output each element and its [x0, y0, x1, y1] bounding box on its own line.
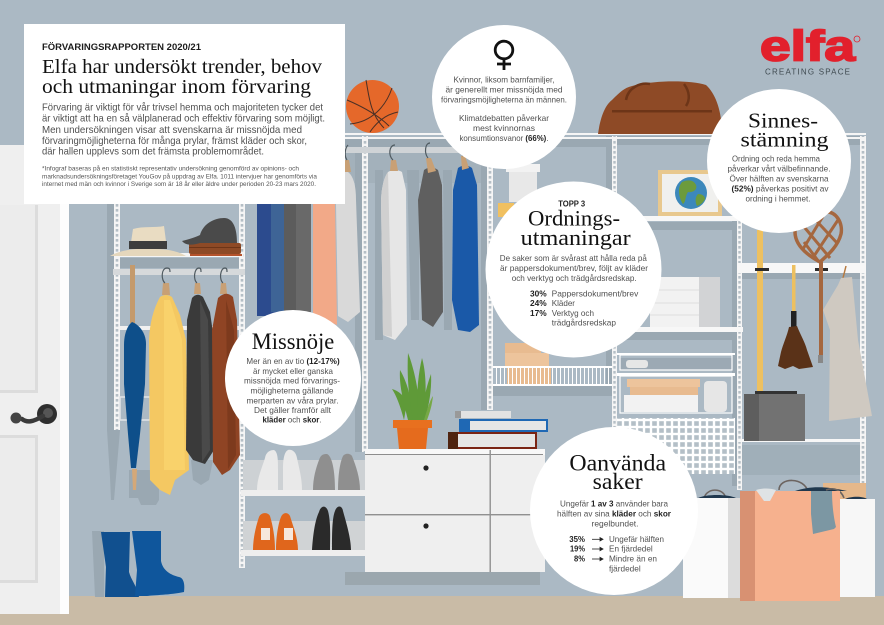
- mop handle and dustpan box: [744, 230, 805, 441]
- stacked towels: [650, 277, 720, 327]
- footnote: *Infograf baseras på en statistiskt representativ undersökning genomförd av opinions- och: [42, 166, 300, 173]
- callout: mood: [707, 89, 851, 233]
- callout text: [441, 75, 567, 143]
- panel: intro: [24, 24, 345, 204]
- callout text: är pappersdokument/brev, följt av kläder: [500, 263, 648, 273]
- icon: cap and folded scarf: [182, 218, 241, 254]
- callout text: Det gäller framför allt: [254, 405, 332, 415]
- middle hanging clothes: [257, 143, 479, 340]
- statistics list with arrows: [569, 534, 664, 574]
- intro text: där hallen upplevs som det främsta problemområdet.: [42, 146, 264, 158]
- statistics list: 30%: [530, 289, 547, 299]
- duffel bag: [598, 81, 722, 134]
- callout heading: Ordnings-: [528, 206, 620, 231]
- title: [42, 56, 323, 98]
- callout text: möjligheterna gällande: [250, 385, 334, 395]
- callout: dissatisfaction: [225, 310, 361, 446]
- icon: female symbol: [495, 41, 513, 70]
- callout text: påverkar vårt välbefinnande.: [728, 164, 830, 174]
- picture frame with globe: [658, 170, 722, 216]
- statistics list with arrows: Mindre än en: [609, 554, 657, 564]
- callout text: [557, 499, 672, 529]
- callout heading: Sinnes-: [748, 108, 818, 132]
- shoe shelves: [241, 450, 365, 556]
- brown coat: [212, 294, 240, 475]
- statistics list with arrows: 35%: [569, 534, 586, 544]
- statistics list with arrows: 8%: [574, 554, 586, 564]
- statistics list: 17%: [530, 308, 547, 318]
- wire basket with cardboard boxes: [493, 343, 612, 386]
- feather duster: [778, 265, 813, 369]
- statistics list: Pappersdokument/brev: [552, 289, 639, 299]
- intro text: förvaringmöjligheterna för många prylar, främst kläder och skor,: [42, 135, 307, 147]
- callout text: [728, 154, 830, 204]
- orange shoes: [253, 513, 298, 550]
- callout text: ordning i hemmet.: [746, 194, 810, 204]
- rubber boots: [101, 531, 184, 597]
- callout text: Över hälften av svenskarna: [730, 174, 829, 184]
- callout text: är generellt mer missnöjda med: [446, 85, 563, 95]
- eyebrow heading: FÖRVARINGSRAPPORTEN 2020/21: [42, 42, 202, 53]
- footnote: [42, 166, 318, 188]
- callout text: och verktyg och trädgårdsredskap.: [512, 273, 637, 283]
- logo: elfa: CREATING SPACE: [765, 67, 850, 76]
- black coat: [186, 295, 214, 464]
- callout text: Kvinnor, liksom barnfamiljer,: [454, 75, 554, 85]
- hangers: [162, 283, 227, 295]
- callout: top 3 challenges: [486, 182, 662, 358]
- callout text: [500, 253, 648, 283]
- icon: door handle: [10, 404, 57, 424]
- intro text: [42, 102, 325, 158]
- statistics list: trädgårdsredskap: [552, 318, 616, 328]
- left hanging clothes: [124, 265, 240, 495]
- shelving uprights: [114, 136, 866, 568]
- callout heading: [740, 108, 829, 152]
- footnote: internet med män och kvinnor i Sverige som är 18 år eller äldre under perioden 20-23 mars 2020.: [42, 181, 316, 188]
- top shelf: [345, 133, 866, 139]
- callout text: Mer än en av tio (12-17%): [246, 356, 340, 366]
- floor: [0, 596, 884, 625]
- callout text: är mycket eller ganska: [253, 366, 333, 376]
- statistics list: Kläder: [552, 298, 575, 308]
- callout heading: Missnöje: [252, 329, 334, 354]
- statistics list: [530, 289, 639, 328]
- footnote: marknadsundersökningsföretaget YouGov på uppdrag av Elfa. 1011 intervjuer har genomförts via: [42, 173, 318, 180]
- scarf: [811, 491, 836, 534]
- callout text: [244, 356, 340, 425]
- callout text: förvaringsmöjligheterna än männen.: [441, 94, 567, 104]
- callout text: (52%) påverkas positivt av: [732, 184, 829, 194]
- callout: women: [432, 25, 576, 169]
- callout text: konsumtionsvanor (66%).: [460, 133, 548, 143]
- callout heading: [569, 451, 666, 494]
- potted plant: [392, 353, 433, 449]
- logo: elfa: elfa: [760, 23, 856, 71]
- umbrella: [124, 265, 146, 490]
- callout text: merparten av våra prylar.: [246, 395, 338, 405]
- intro text: är viktigt att ha en så välplanerad och effektiv förvaring som möjligt.: [42, 113, 325, 125]
- callout heading: stämning: [740, 128, 829, 152]
- callout text: Ungefär 1 av 3 använder bara: [560, 499, 668, 509]
- callout text: De saker som är svårast att hålla reda på: [500, 253, 647, 263]
- callout text: regelbundet.: [592, 519, 638, 529]
- wall shadows: [92, 136, 860, 597]
- grey shoes: [313, 454, 360, 490]
- statistics list with arrows: Ungefär hälften: [609, 534, 664, 544]
- shelf: hats: [110, 218, 243, 257]
- callout text: hälften av sina kläder och skor: [557, 509, 672, 519]
- callout heading: [521, 206, 631, 250]
- carpet beater: [795, 212, 841, 363]
- hanging towel: [823, 266, 872, 421]
- intro text: Förvaring är viktigt för vår trivsel hemma och majoriteten tycker det: [42, 102, 323, 114]
- statistics list with arrows: fjärdedel: [609, 564, 641, 574]
- hanging rods: [113, 147, 490, 420]
- callout text: missnöjda med förvarings-: [244, 375, 340, 385]
- callout text: Ordning och reda hemma: [732, 154, 820, 164]
- yellow coat: [149, 295, 189, 495]
- shopping bags: [683, 480, 875, 601]
- statistics list: Verktyg och: [552, 308, 594, 318]
- logo: elfa: [760, 23, 860, 76]
- statistics list: 24%: [530, 298, 547, 308]
- callout heading: saker: [593, 469, 643, 494]
- dresser: [365, 449, 545, 572]
- callout text: Klimatdebatten påverkar: [459, 113, 549, 123]
- basketball: [346, 80, 399, 133]
- wire baskets: [617, 353, 735, 474]
- shelves right section: [617, 216, 866, 442]
- black shoes: [312, 506, 351, 550]
- callout text: kläder och skor.: [262, 415, 322, 425]
- label: TOPP 3: [558, 200, 586, 209]
- intro text: Men undersökningen visar att svenskarna är missnöjda med: [42, 125, 302, 136]
- hangers: [344, 156, 469, 173]
- white shoes: [257, 450, 302, 490]
- wall clips: [755, 268, 828, 271]
- title: Elfa har undersökt trender, behov: [42, 56, 323, 78]
- title: och utmaningar inom förvaring: [42, 76, 311, 98]
- door: [0, 145, 69, 614]
- callout: unused items: [530, 427, 698, 595]
- icon: arrows: [592, 538, 603, 561]
- icon: straw hat: [110, 226, 186, 256]
- callout heading: utmaningar: [521, 225, 631, 250]
- storage box and folder: [498, 164, 540, 217]
- stack of books: [448, 411, 548, 449]
- callout heading: Oanvända: [569, 451, 666, 476]
- statistics list with arrows: 19%: [570, 544, 586, 554]
- statistics list with arrows: En fjärdedel: [609, 544, 653, 554]
- callout text: mest kvinnornas: [473, 123, 535, 133]
